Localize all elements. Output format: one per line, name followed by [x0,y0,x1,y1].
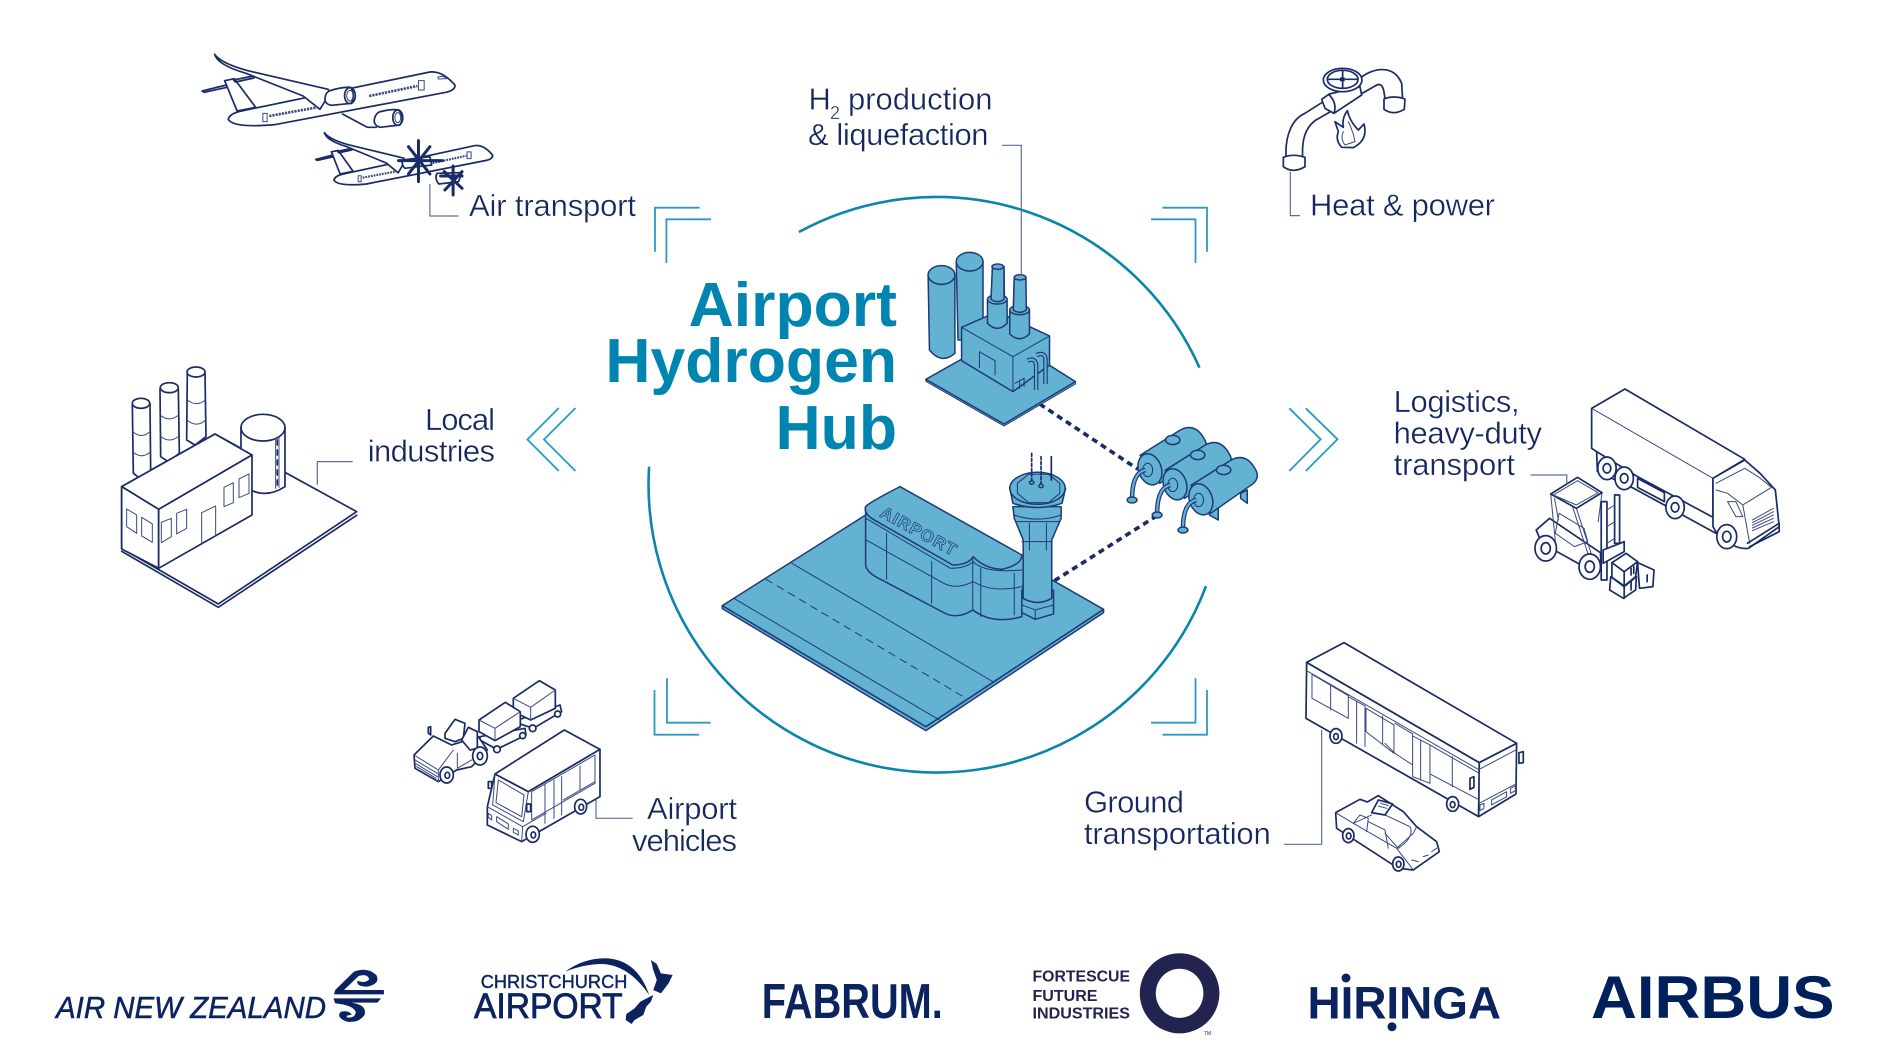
logo: Fortescue Future Industries: TM [1204,1031,1211,1037]
label: Ground transportation: transportation [1084,816,1271,851]
label: Logistics, heavy-duty transport: heavy-duty [1394,416,1542,450]
label: Heat and power: Heat & power [1310,188,1495,223]
baggage trailers [479,681,562,753]
van [487,730,600,842]
label: H2 production and liquefaction: & liquefaction [808,117,988,152]
title: Airport [689,270,897,340]
icon: aircraft [202,54,493,216]
label: Airport vehicles [632,791,737,858]
label: Ground transportation [1084,785,1271,851]
label: Ground transportation: Ground [1084,785,1184,820]
logo: Christchurch Airport: CHRISTCHURCH [481,971,627,992]
text: AIRPORT sign: AIRPORT [877,503,961,560]
label: H2 production and liquefaction: 2 [830,103,840,123]
plane: turboprop [316,133,493,195]
logo: Fortescue Future Industries: FORTESCUE [1032,969,1130,986]
central illustration [722,252,1257,731]
dashed connection lines [1040,404,1158,581]
logo: Fortescue Future Industries [1032,953,1219,1037]
title: Hydrogen [605,326,897,396]
illustration: hydrogen storage tanks [1127,428,1257,533]
label: Logistics, heavy-duty transport: Logistics, [1394,384,1520,419]
icon: heat and power pipe [1283,68,1405,216]
plane: turbofan [202,54,455,127]
label: H2 production and liquefaction: production [848,81,992,116]
label: Logistics, heavy-duty transport: transport [1394,447,1515,482]
logo: Fortescue Future Industries: INDUSTRIES [1032,1005,1130,1022]
label: Airport vehicles: Airport [647,791,737,826]
title: Hub [776,393,897,463]
icon: local industries factory [122,367,357,607]
icon: bus and taxi [1284,643,1523,871]
logo: Christchurch Airport: AIRPORT [474,987,623,1026]
corner brackets and chevrons [527,208,1338,735]
label: Local industries: Local [425,402,495,437]
logo: Airbus: AIRBUS [1591,964,1834,1031]
bus [1306,643,1523,817]
label: Logistics, heavy-duty transport [1394,384,1542,482]
label: Airport vehicles: vehicles [632,823,737,858]
illustration: control tower [1010,453,1066,619]
truck [1592,389,1779,549]
label: H2 production and liquefaction: H [808,81,831,116]
tug vehicle [414,719,487,783]
illustration: airport pad and terminal [722,487,1104,731]
logo: Fortescue Future Industries: FUTURE [1032,988,1098,1005]
icon: truck and forklift [1530,389,1779,598]
logo: Air New Zealand: AIR NEW ZEALAND [54,990,326,1025]
hub circle arcs [649,197,1206,773]
logo: Christchurch Airport [474,958,673,1026]
logo: Fabrum: FABRUM. [762,975,943,1029]
logo: Air New Zealand [54,970,384,1025]
label: Air transport: Air transport [469,188,636,223]
illustration: H2 production plant [926,252,1075,426]
label: Local industries: industries [368,434,495,469]
logo: Hiringa: HIRINGA [1308,977,1501,1028]
forklift [1535,477,1654,598]
title [605,270,897,463]
icon: airport vehicles [414,681,633,842]
label: Local industries [368,402,495,469]
taxi [1336,796,1439,871]
label: H2 production and liquefaction [808,81,1021,275]
